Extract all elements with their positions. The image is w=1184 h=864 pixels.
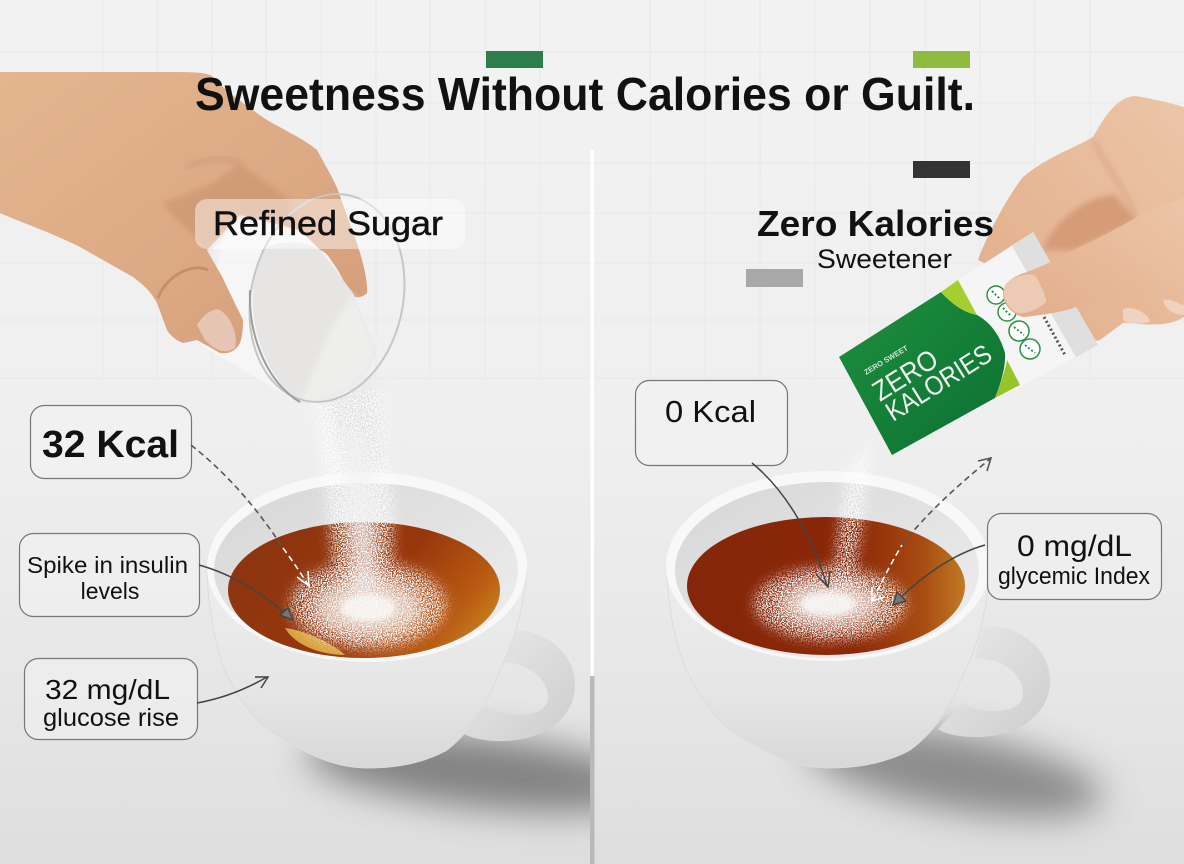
heading: zero kalories (757, 203, 994, 274)
arrow: insulin spike (199, 565, 293, 620)
cup shadow right (801, 709, 1109, 835)
sachet: ZERO (867, 343, 943, 407)
sugar pile (290, 561, 446, 649)
callout: 32 kcal: 32 Kcal (42, 424, 179, 466)
sweetener stream (832, 440, 872, 590)
sweetener pile (754, 567, 906, 641)
sweetener cup (666, 471, 1050, 768)
panel: refined sugar (0, 72, 658, 826)
arrow: dashed upward (872, 458, 991, 601)
back of hand (978, 96, 1184, 341)
sachet green panel (839, 292, 1005, 455)
divider (590, 150, 594, 676)
glass body (200, 195, 343, 403)
callout: insulin spike (20, 534, 200, 616)
title: Sweetness Without Calories or Guilt. (195, 68, 975, 120)
colour tab: dark (913, 161, 970, 178)
heading: refined sugar: Refined Sugar (213, 205, 443, 243)
sachet: KALORIES (880, 339, 997, 427)
callout: insulin spike: Spike in insulin (27, 552, 188, 578)
sugar cup (207, 472, 575, 768)
callout: 32 kcal (30, 406, 192, 478)
arrow: kcal to sugar (191, 445, 309, 586)
colour tab: lime (913, 51, 970, 68)
heading: zero kalories: Zero Kalories (757, 203, 994, 244)
sachet (839, 232, 1098, 455)
callout: glucose rise (24, 658, 198, 740)
glass of sugar (231, 179, 423, 417)
callout: glycemic index (988, 514, 1162, 600)
arrow: glycemic index (893, 545, 985, 605)
tea (228, 522, 500, 658)
heading: zero kalories: Sweetener (817, 244, 952, 274)
panel: zero kalories (666, 96, 1184, 835)
pouring hand (0, 72, 367, 353)
sachet text: ZERO SWEET (862, 343, 910, 377)
colour tab: green (486, 51, 543, 68)
colour tab: gray (746, 269, 803, 287)
callout: 0 kcal (636, 380, 788, 466)
arrow: 0 kcal (752, 463, 830, 587)
callout: glycemic index: glycemic Index (998, 563, 1150, 590)
thumb (1003, 197, 1184, 324)
callout: glucose rise: 32 mg/dL (45, 674, 170, 705)
callout: glycemic index: 0 mg/dL (1017, 530, 1132, 563)
callout: insulin spike: levels (81, 578, 139, 604)
callout: glucose rise: glucose rise (43, 704, 179, 732)
tea (687, 517, 965, 655)
callout: 0 kcal: 0 Kcal (665, 394, 756, 429)
cup shadow left (302, 718, 658, 826)
arrow: glucose rise (197, 677, 268, 703)
sugar stream (312, 385, 393, 590)
sachet icons (987, 286, 1040, 359)
heading: refined sugar (195, 199, 465, 249)
